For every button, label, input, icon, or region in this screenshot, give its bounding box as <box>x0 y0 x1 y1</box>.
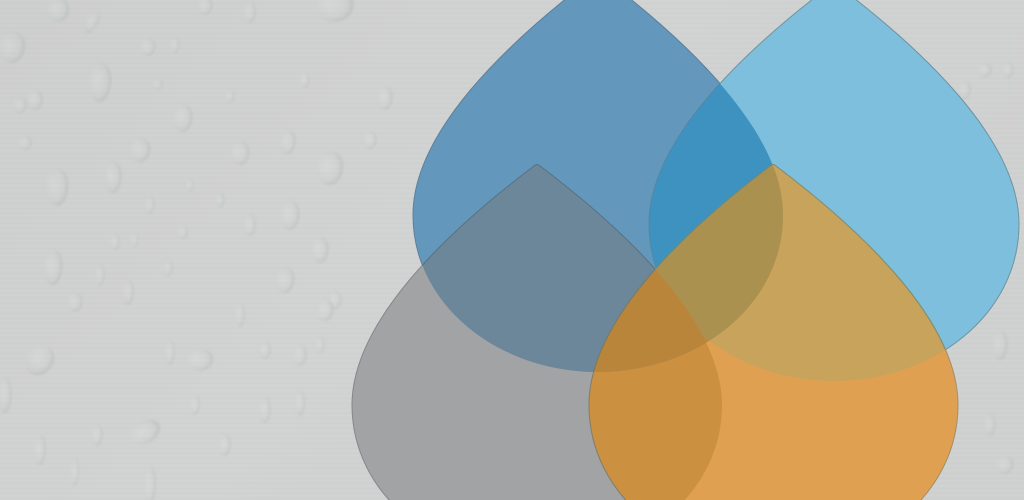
overlap: grey and dark blue <box>422 164 655 372</box>
overlap: orange, grey and dark blue <box>593 269 706 372</box>
overlap: orange, dark blue and light blue <box>656 164 783 340</box>
drop: grey <box>352 164 722 500</box>
drop: dark blue <box>413 0 783 372</box>
drop: light blue <box>649 0 1019 381</box>
overlap: dark blue and light blue <box>648 84 772 268</box>
overlap: orange and dark blue <box>655 256 710 342</box>
drop: orange <box>589 164 958 500</box>
overlap: orange and grey <box>588 282 722 500</box>
overlap: orange and light blue <box>660 164 946 381</box>
